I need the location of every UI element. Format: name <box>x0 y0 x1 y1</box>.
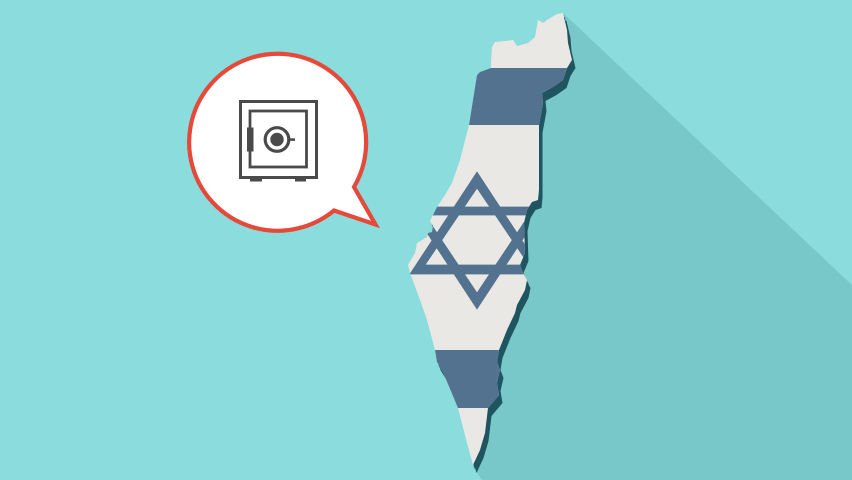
map of Israel with flag <box>408 13 572 465</box>
infographic scene <box>187 13 852 480</box>
safe right foot <box>295 178 306 182</box>
safe body <box>240 102 316 178</box>
bubble body <box>189 54 376 231</box>
safe dial knob <box>289 138 295 141</box>
map base <box>408 13 572 465</box>
top flag stripe <box>469 68 567 125</box>
safe left foot <box>250 178 262 182</box>
safe hinge <box>247 128 254 152</box>
icon: safe <box>240 102 316 182</box>
safe door <box>250 111 306 167</box>
star of David <box>410 172 529 310</box>
bottom flag stripe <box>435 350 500 408</box>
long shadow of the map <box>473 13 852 480</box>
map extrusion shadow <box>410 17 576 473</box>
safe dial centre <box>270 133 284 146</box>
speech bubble <box>189 54 376 231</box>
safe dial ring <box>265 128 289 151</box>
